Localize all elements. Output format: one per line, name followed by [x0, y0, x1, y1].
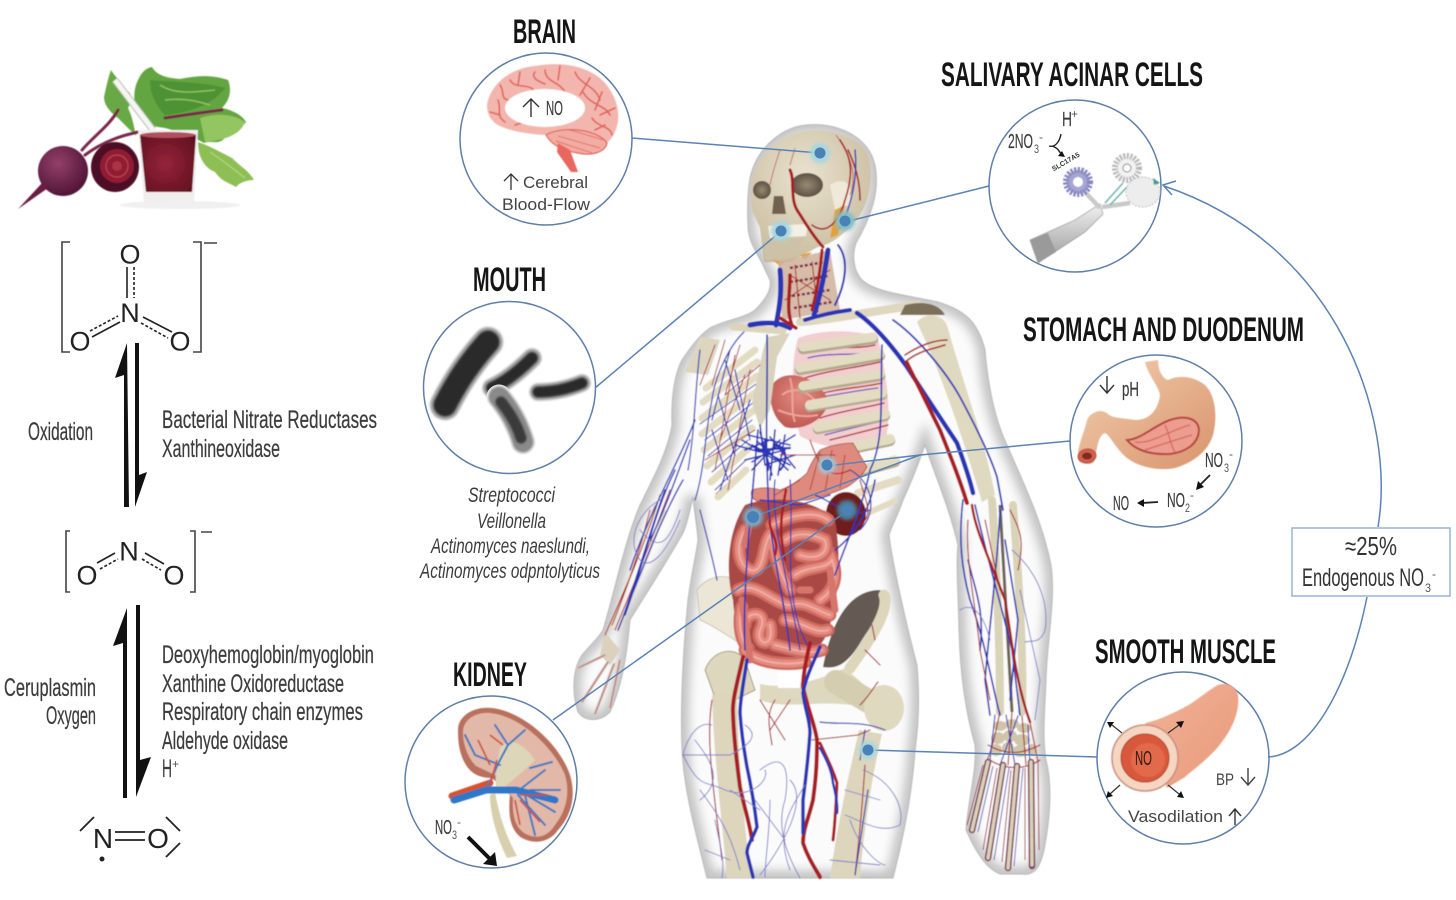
panel: mouth [424, 302, 596, 474]
organs: lungs and heart behind ribs [771, 331, 889, 448]
skeleton: arms and hands [578, 316, 1040, 868]
stomach text: nitrate to nitrite to NO: - [1190, 488, 1194, 502]
beetroot and juice photo [18, 67, 254, 209]
stomach text: lower pH: pH [1122, 379, 1139, 401]
NO label in lumen: NO [1135, 748, 1152, 770]
brain text: cerebral blood flow [502, 173, 591, 214]
callout: endogenous nitrate: 3 [1425, 581, 1431, 595]
heading: salivary acinar cells: SALIVARY ACINAR CELLS [941, 56, 1203, 94]
label: nitrate reduction enzymes: Xanthineoxidase [162, 435, 280, 463]
text: blood pressure decrease: BP [1216, 770, 1234, 789]
stomach text: nitrate to nitrite to NO: 2 [1185, 501, 1190, 515]
label: nitrite reduction enzymes: Xanthine Oxidoreductase [162, 670, 344, 698]
icon: oral bacteria [445, 342, 582, 442]
brain text: increase in NO: NO [546, 98, 563, 120]
kidney text: nitrate: NO [435, 817, 452, 839]
nitrite structure [66, 531, 212, 592]
organ marker: stomach [818, 456, 836, 474]
photo shadow [120, 201, 240, 209]
panel: stomach and duodenum [1070, 355, 1242, 527]
callout: endogenous nitrate: - [1432, 567, 1436, 581]
straw [115, 80, 153, 130]
atoms: O [169, 326, 191, 356]
stomach text: lower pH [1100, 376, 1139, 401]
stomach text: nitrate to nitrite to NO: NO [1167, 490, 1185, 512]
human body illustration [560, 110, 1070, 890]
brackets [66, 531, 212, 592]
label: nitrite reduction enzymes: Respiratory chain enzymes [162, 698, 363, 726]
blood vessels of the arms [605, 313, 1046, 722]
beet stems [82, 110, 222, 155]
partial bonds [100, 559, 161, 570]
callout: endogenous nitrate [1292, 528, 1450, 596]
label: ceruloplasmin and oxygen: Ceruplasmin [4, 674, 96, 702]
label: nitrate reduction enzymes [162, 406, 377, 463]
label: oxidation: Oxidation [28, 418, 93, 446]
panel: kidney [405, 696, 577, 868]
skull and jaw [751, 130, 871, 266]
nitric oxide structure: O [147, 823, 169, 854]
salivary text: nitrate uptake: 2NO [1008, 131, 1033, 153]
salivary text: nitrate uptake [1008, 107, 1078, 156]
brackets [62, 242, 217, 352]
organ marker: brain [810, 143, 830, 163]
stomach text: nitrate to nitrite to NO: NO [1113, 493, 1129, 515]
atoms: O [69, 326, 91, 356]
organ marker: salivary gland [835, 211, 855, 231]
label: nitrate reduction enzymes: Bacterial Nitrate Reductases [162, 406, 377, 434]
arrow: transport into the cell [1049, 134, 1065, 157]
arrow: nitrate excretion [468, 837, 497, 866]
organ marker: mouth [771, 221, 791, 241]
organ marker: smooth muscle [859, 741, 877, 759]
organ marker: duodenum [743, 507, 763, 527]
label: nitrite reduction enzymes [162, 641, 374, 783]
equilibrium arrows nitrite/nitric oxide [113, 605, 151, 798]
stomach text: nitrate to nitrite to NO: 3 [1224, 461, 1229, 475]
whole beet [18, 146, 88, 209]
heading: mouth: MOUTH [473, 261, 546, 299]
salivary text: nitrate uptake: + [1071, 107, 1078, 121]
atoms [69, 240, 191, 356]
text: vasodilation increase: Vasodilation [1128, 807, 1223, 826]
panel: brain [460, 53, 632, 225]
stomach text: nitrate to nitrite to NO: NO [1205, 450, 1223, 472]
bacteria species list: Streptococci [468, 484, 556, 507]
brain text: cerebral blood flow: Cerebral [523, 173, 588, 192]
atoms: O [76, 560, 98, 590]
atoms: O [119, 240, 141, 270]
bacteria species list: Veillonella [477, 510, 546, 533]
stomach text: nitrate to nitrite to NO [1113, 447, 1233, 515]
skeleton: ribs, sternum, clavicles [702, 303, 945, 512]
skeleton: pelvis and legs [697, 576, 904, 878]
icon: brain [487, 64, 618, 172]
blood vessels of the torso [688, 332, 882, 650]
brain text: increase in NO [523, 98, 563, 120]
atoms: O [163, 560, 185, 590]
partial bonds [90, 267, 168, 338]
atoms: N [120, 298, 140, 328]
kidney text: nitrate: - [457, 815, 461, 829]
icon: stomach [1077, 360, 1215, 469]
brain text: cerebral blood flow: Blood-Flow [502, 195, 591, 214]
nitric oxide structure: N [93, 823, 113, 854]
icon: salivary duct [1030, 156, 1160, 263]
label: ceruloplasmin and oxygen: Oxygen [46, 702, 96, 730]
kidney text: nitrate: 3 [452, 828, 457, 842]
sliced beet [91, 142, 139, 192]
salivary text: nitrate uptake: 3 [1034, 142, 1039, 156]
label: nitrite reduction enzymes: + [172, 757, 179, 771]
bonds [92, 267, 172, 337]
label: nitrite reduction enzymes: Aldehyde oxidase [162, 727, 288, 755]
dilation arrows [1106, 721, 1184, 798]
callout: endogenous nitrate: ≈25% [1345, 531, 1397, 561]
panel: smooth muscle [1097, 672, 1269, 844]
icon: kidney cross-section [452, 708, 573, 858]
kidney organ [826, 492, 866, 536]
nitric oxide structure [80, 817, 180, 862]
intestines [729, 500, 839, 666]
salivary text: nitrate uptake: H [1062, 109, 1072, 131]
equilibrium arrows nitrate/nitrite [115, 343, 147, 507]
bacteria species list: Actinomyces odpntolyticus [419, 560, 600, 583]
nitrate structure [62, 240, 217, 356]
neck vertebrae and vessels [750, 140, 860, 328]
panel: salivary acinar cells [989, 100, 1161, 272]
text: blood pressure decrease [1216, 768, 1255, 789]
stomach text: nitrate to nitrite to NO: - [1229, 447, 1233, 461]
blood vessels of the legs [683, 625, 901, 878]
label: nitrite reduction enzymes: H [162, 755, 172, 783]
heading: smooth muscle: SMOOTH MUSCLE [1095, 633, 1276, 671]
organ marker: kidney [837, 500, 857, 520]
bacteria species list [419, 484, 600, 583]
juice glass [138, 130, 198, 203]
stomach [751, 443, 867, 502]
heading: brain: BRAIN [513, 13, 576, 51]
bonds [97, 553, 164, 564]
icon: blood vessel [1112, 684, 1238, 791]
heading: kidney: KIDNEY [453, 656, 527, 694]
thin vessels of the left chest [700, 362, 756, 494]
beet leaves [104, 67, 254, 187]
translucent skin silhouette [560, 110, 1070, 890]
transporter label: SLC17A5 [1051, 152, 1081, 173]
atoms [76, 536, 185, 590]
connector lines from organs to circles [553, 138, 1097, 757]
bacteria species list: Actinomyces naeslundi, [430, 535, 590, 558]
label: ceruloplasmin and oxygen [4, 674, 96, 730]
label: nitrite reduction enzymes: Deoxyhemoglobin/myoglobin [162, 641, 374, 669]
salivary text: nitrate uptake: - [1039, 130, 1043, 144]
atoms: N [119, 536, 139, 566]
curved arrow: recirculation to salivary glands [1163, 181, 1381, 757]
